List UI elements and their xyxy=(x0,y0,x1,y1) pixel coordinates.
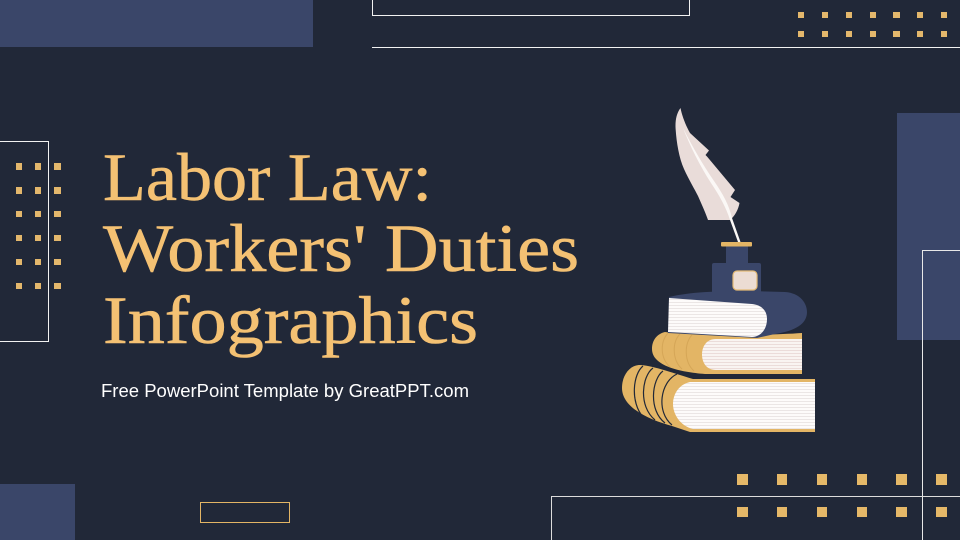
title xyxy=(103,139,579,358)
panel: left outline frame xyxy=(0,142,48,342)
title: Workers' Duties xyxy=(103,210,579,286)
title: Infographics xyxy=(103,282,478,358)
panel: right outline frame xyxy=(922,250,960,540)
dot grid: bottom right xyxy=(737,474,947,517)
panel: bottom outline frame xyxy=(552,496,960,540)
panel: bottom gold outline box xyxy=(200,502,290,522)
panel: right blue block xyxy=(897,113,960,340)
illustration: feather, ink bottle and books xyxy=(622,108,815,432)
icon: bottom book xyxy=(622,365,815,432)
icon: feather xyxy=(675,108,740,242)
icon: ink bottle xyxy=(712,242,761,299)
subtitle: Free PowerPoint Template by GreatPPT.com xyxy=(101,381,469,401)
panel: top left blue block xyxy=(0,0,313,47)
icon: top book xyxy=(668,291,807,338)
icon: middle book xyxy=(652,332,802,374)
top white rule xyxy=(372,47,960,48)
panel: bottom left blue block xyxy=(0,484,75,540)
dot grid: left xyxy=(16,163,61,289)
dot grid: top right xyxy=(798,12,947,37)
title: Labor Law: xyxy=(103,139,432,215)
panel: top outline frame xyxy=(372,0,690,16)
